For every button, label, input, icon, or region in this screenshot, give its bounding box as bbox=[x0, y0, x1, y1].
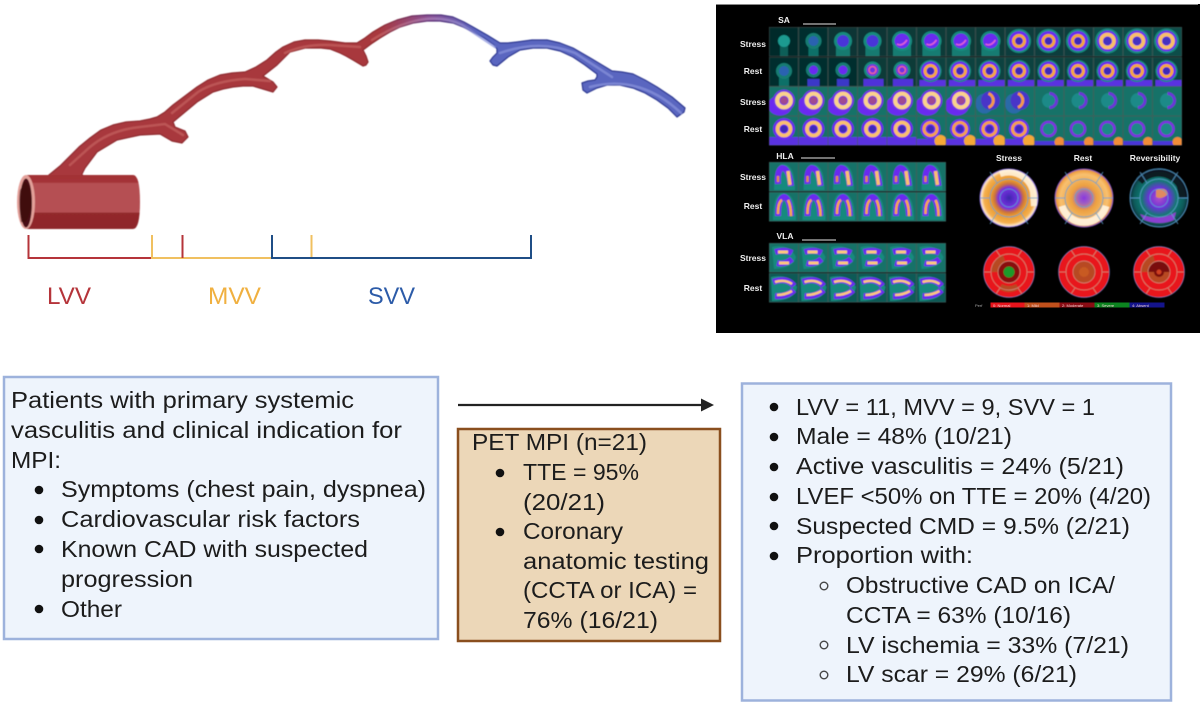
polar maps bottom row bbox=[984, 246, 1184, 298]
PET MPI text bbox=[472, 429, 709, 633]
perfusion legend: 1: Mild bbox=[1027, 303, 1039, 308]
panel: patients bbox=[4, 377, 438, 639]
row and view labels bbox=[740, 15, 1181, 293]
row and view labels: Stress bbox=[740, 39, 766, 49]
panel: results bbox=[742, 384, 1171, 700]
results text: Male = 48% (10/21) bbox=[796, 423, 1012, 449]
label MVV: MVV bbox=[208, 283, 262, 310]
polar maps top row bbox=[980, 168, 1188, 228]
row and view labels: Stress bbox=[996, 153, 1022, 163]
patients text: vasculitis and clinical indication for bbox=[11, 417, 402, 443]
label SVV: SVV bbox=[368, 283, 416, 310]
patients text: Known CAD with suspected bbox=[61, 536, 368, 562]
perfusion legend: Perf bbox=[975, 303, 983, 308]
results text: LV ischemia = 33% (7/21) bbox=[846, 632, 1129, 658]
row and view labels: Rest bbox=[744, 201, 762, 211]
results text: Active vasculitis = 24% (5/21) bbox=[796, 453, 1124, 479]
PET MPI text: TTE = 95% bbox=[523, 459, 639, 485]
PET MPI text: 76% (16/21) bbox=[523, 607, 658, 633]
results text: Obstructive CAD on ICA/ bbox=[846, 572, 1115, 598]
row and view labels: SA bbox=[778, 15, 790, 25]
PET MPI text: anatomic testing bbox=[523, 548, 709, 574]
patients text: MPI: bbox=[11, 447, 61, 473]
row and view labels: Rest bbox=[744, 283, 762, 293]
results text bbox=[770, 394, 1151, 687]
row and view labels: Stress bbox=[740, 172, 766, 182]
PET MPI text: PET MPI (n=21) bbox=[472, 429, 647, 455]
vessel tree bbox=[49, 15, 685, 178]
PET MPI text: Coronary bbox=[523, 518, 623, 544]
results text: Proportion with: bbox=[796, 542, 973, 568]
VLA image grid bbox=[769, 243, 946, 302]
patients text bbox=[11, 387, 426, 622]
perfusion legend: 0: Normal bbox=[993, 303, 1010, 308]
label LVV: LVV bbox=[47, 283, 92, 310]
results text: LV scar = 29% (6/21) bbox=[846, 661, 1077, 687]
panel: PET MPI bbox=[458, 429, 720, 641]
arrow bbox=[458, 398, 714, 412]
results text: LVV = 11, MVV = 9, SVV = 1 bbox=[796, 394, 1095, 420]
brackets bbox=[28, 235, 531, 258]
slider marks bbox=[801, 24, 836, 240]
row and view labels: VLA bbox=[776, 231, 794, 241]
results text: Suspected CMD = 9.5% (2/21) bbox=[796, 513, 1130, 539]
PET MPI text: (20/21) bbox=[523, 489, 605, 515]
patients text: Symptoms (chest pain, dyspnea) bbox=[61, 476, 426, 502]
PET MPI text: (CCTA or ICA) = bbox=[523, 577, 697, 603]
perfusion legend: 4: Absent bbox=[1132, 303, 1150, 308]
row and view labels: Rest bbox=[744, 66, 762, 76]
row and view labels: Stress bbox=[740, 97, 766, 107]
results text: CCTA = 63% (10/16) bbox=[846, 602, 1071, 628]
SA image grid bbox=[768, 27, 1182, 147]
patients text: Patients with primary systemic bbox=[11, 387, 354, 413]
row and view labels: Rest bbox=[1074, 153, 1092, 163]
vessel diagram with brackets bbox=[16, 14, 686, 310]
cylinder artery bbox=[17, 175, 140, 229]
row and view labels: Rest bbox=[744, 124, 762, 134]
results text: LVEF <50% on TTE = 20% (4/20) bbox=[796, 483, 1151, 509]
row and view labels: Stress bbox=[740, 253, 766, 263]
perfusion legend bbox=[975, 302, 1164, 308]
patients text: Other bbox=[61, 596, 122, 622]
patients text: progression bbox=[61, 566, 193, 592]
row and view labels: Reversibility bbox=[1130, 153, 1181, 163]
perfusion legend: 3: Severe bbox=[1097, 303, 1115, 308]
panel: PET scan images bbox=[716, 4, 1200, 333]
row and view labels: HLA bbox=[776, 151, 794, 161]
HLA image grid bbox=[769, 162, 946, 222]
patients text: Cardiovascular risk factors bbox=[61, 506, 360, 532]
bottom panels bbox=[2, 376, 1172, 702]
perfusion legend: 2: Moderate bbox=[1062, 303, 1084, 308]
